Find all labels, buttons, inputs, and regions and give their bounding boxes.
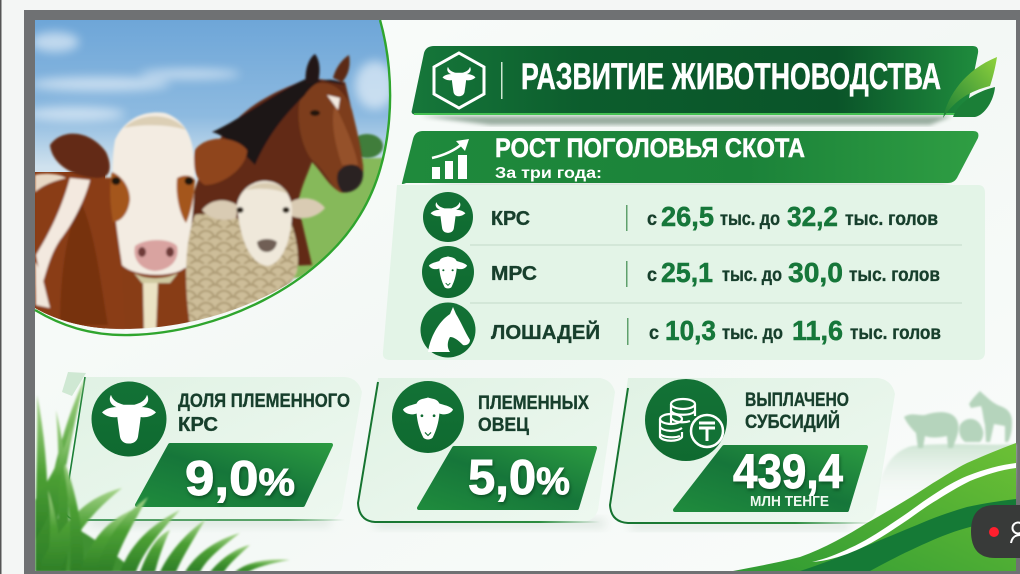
card: subsidies paid: МЛН ТЕНГЕ xyxy=(750,493,829,510)
row: small cattle: с xyxy=(647,265,657,286)
row: horses: с xyxy=(649,323,659,344)
meadow xyxy=(290,158,390,278)
title banner xyxy=(412,46,978,125)
icon: growth chart xyxy=(432,139,469,179)
row: small cattle: 25,1 xyxy=(661,257,713,288)
row: small cattle: тыс. до xyxy=(722,265,782,286)
card: subsidies paid: ВЫПЛАЧЕНО xyxy=(745,390,849,411)
section banner xyxy=(402,131,978,193)
soft card shadows xyxy=(90,518,850,529)
card: subsidies paid: СУБСИДИЙ xyxy=(745,411,840,433)
icon: hexagon with cow head xyxy=(434,53,484,108)
card: breeding sheep: ОВЕЦ xyxy=(478,415,529,436)
card: share of breeding cattle xyxy=(62,372,362,520)
row: small cattle: 30,0 xyxy=(788,257,843,288)
card: share of breeding cattle: КРС xyxy=(178,414,218,436)
row: small cattle xyxy=(422,246,940,298)
cow body xyxy=(35,174,135,330)
icon: coins and tenge xyxy=(660,399,723,447)
silhouettes: farm animals xyxy=(875,391,1016,500)
icon: horse head xyxy=(428,307,470,352)
card: breeding sheep: ПЛЕМЕННЫХ xyxy=(478,393,589,414)
icon: leaves xyxy=(943,57,997,118)
row: cattle xyxy=(423,192,938,242)
card: share of breeding cattle: 9,0% xyxy=(185,452,295,506)
card: subsidies paid: 439,4 xyxy=(733,446,843,499)
dark left edge of screen xyxy=(0,0,2,574)
section heading: РОСТ ПОГОЛОВЬЯ СКОТА xyxy=(495,133,805,163)
row: cattle: 32,2 xyxy=(787,201,838,232)
grass foreground xyxy=(35,378,290,572)
row: small cattle: тыс. голов xyxy=(849,265,940,286)
card: breeding sheep xyxy=(358,378,615,522)
subheading: За три года: xyxy=(495,165,602,182)
cow ears xyxy=(50,134,110,178)
card: share of breeding cattle: ДОЛЯ ПЛЕМЕННОГО xyxy=(178,391,350,412)
recording chip xyxy=(971,505,1020,558)
row: small cattle: МРС xyxy=(491,263,537,285)
panel: livestock growth rows xyxy=(383,185,985,360)
row: horses: 10,3 xyxy=(665,315,716,346)
row: horses: тыс. до xyxy=(722,323,783,344)
green swoosh bottom right xyxy=(733,443,1016,571)
sheep wool xyxy=(186,214,298,325)
sheep head xyxy=(202,200,238,220)
row: horses xyxy=(420,302,941,358)
horse xyxy=(190,78,363,270)
row: horses: 11,6 xyxy=(792,315,843,346)
row: cattle: тыс. до xyxy=(720,209,780,230)
row: cattle: с xyxy=(647,209,657,230)
row: horses: ЛОШАДЕЙ xyxy=(491,320,600,344)
row: cattle: КРС xyxy=(491,208,530,230)
row: cattle: тыс. голов xyxy=(845,209,938,230)
row: horses: тыс. голов xyxy=(850,323,941,344)
card: breeding sheep: 5,0% xyxy=(468,451,570,505)
cow head xyxy=(113,112,194,275)
green arc around photo xyxy=(35,20,390,335)
row: cattle: 26,5 xyxy=(661,201,714,232)
photo: cow, horse and sheep in a meadow xyxy=(25,20,395,340)
card: subsidies paid xyxy=(610,378,895,523)
